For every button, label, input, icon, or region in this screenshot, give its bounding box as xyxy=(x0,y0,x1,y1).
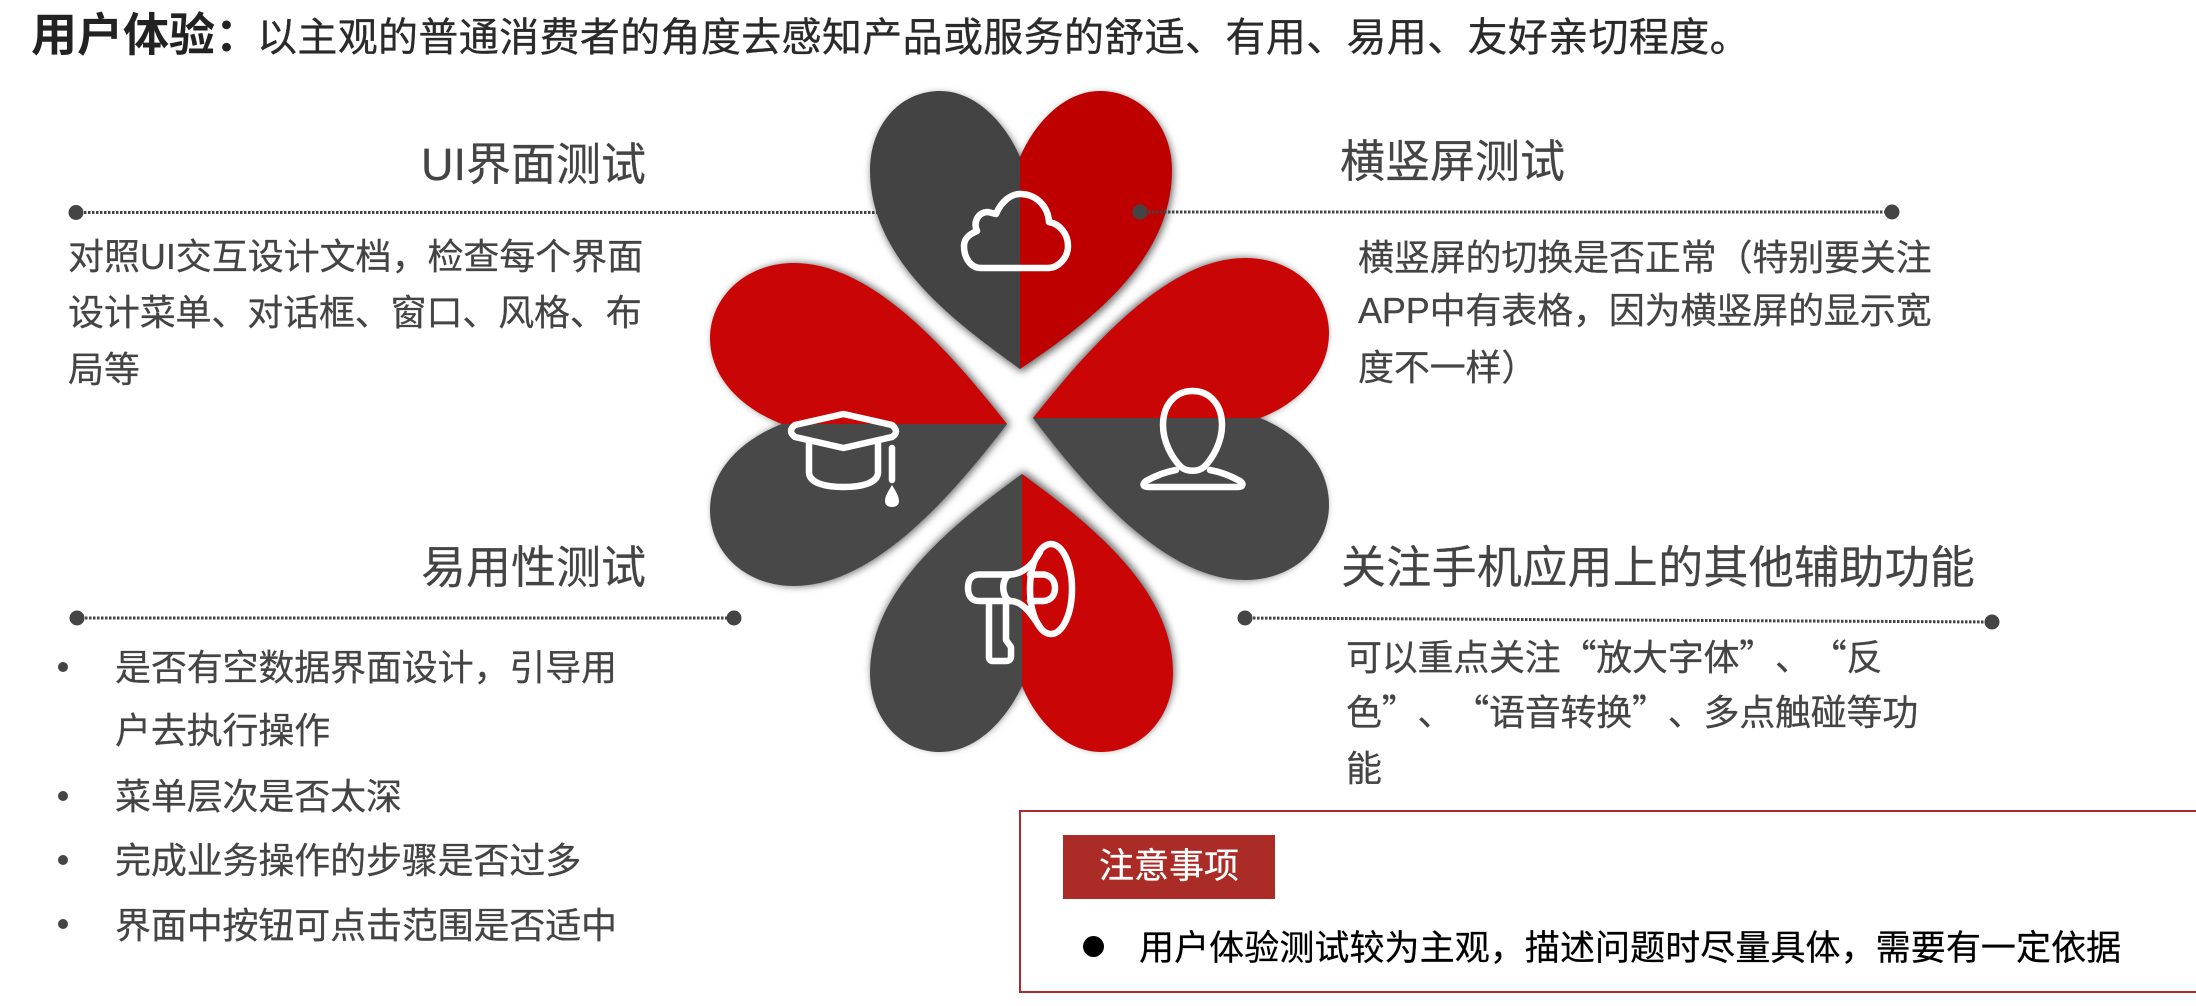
icon: megaphone xyxy=(968,544,1072,661)
connector line: UI test xyxy=(68,205,877,220)
heading: usability test: 易用性测试 xyxy=(421,542,646,593)
title: definition of user experience xyxy=(31,9,1750,61)
body text: UI interface test: 局等 xyxy=(68,349,140,390)
body text: orientation test: 度不一样） xyxy=(1358,339,1537,391)
petal: bottom xyxy=(870,474,1173,752)
connector line: auxiliary functions xyxy=(1238,610,2000,630)
panel: UI interface test xyxy=(68,139,646,390)
bullet list: usability test xyxy=(58,647,617,946)
body text: orientation test xyxy=(1358,229,1932,391)
title keyword: 用户体验： xyxy=(31,9,261,61)
panel: auxiliary functions xyxy=(1341,542,1975,792)
heading: auxiliary functions: 关注手机应用上的其他辅助功能 xyxy=(1341,542,1975,593)
body text: auxiliary functions: 色”、“语音转换”、多点触碰等功 xyxy=(1346,684,1918,736)
icon: cloud xyxy=(964,194,1068,268)
panel: orientation test xyxy=(1340,136,1932,391)
petal: top xyxy=(870,91,1172,369)
panel: usability test xyxy=(58,542,646,946)
body text: auxiliary functions: 可以重点关注“放大字体”、“反 xyxy=(1346,629,1882,681)
bullet list: usability test: 是否有空数据界面设计，引导用 xyxy=(115,647,617,688)
callout text: 用户体验测试较为主观，描述问题时尽量具体，需要有一定依据 xyxy=(1139,929,2121,968)
bullet list: usability test: 户去执行操作 xyxy=(115,710,330,751)
body text: UI interface test xyxy=(68,236,643,390)
petal: left xyxy=(710,263,1007,586)
icon: graduation cap xyxy=(791,414,899,507)
heading: UI interface test: UI界面测试 xyxy=(421,139,646,190)
icon: person xyxy=(1144,391,1242,487)
body text: auxiliary functions: 能 xyxy=(1346,740,1382,792)
body text: orientation test: APP中有表格，因为横竖屏的显示宽 xyxy=(1358,290,1932,331)
heading: orientation test: 横竖屏测试 xyxy=(1340,136,1565,187)
body text: orientation test: 横竖屏的切换是否正常（特别要关注 xyxy=(1358,229,1932,281)
body text: UI interface test: 对照UI交互设计文档，检查每个界面 xyxy=(68,236,643,277)
title definition text: 以主观的普通消费者的角度去感知产品或服务的舒适、有用、易用、友好亲切程度。 xyxy=(257,16,1750,60)
bullet list: usability test: 界面中按钮可点击范围是否适中 xyxy=(115,905,617,946)
connector line: usability test xyxy=(70,610,742,626)
body text: UI interface test: 设计菜单、对话框、窗口、风格、布 xyxy=(68,292,642,333)
callout label: 注意事项 xyxy=(1099,847,1239,886)
callout label xyxy=(1063,835,1275,899)
petal: right xyxy=(1033,258,1329,580)
bullet list: usability test: 菜单层次是否太深 xyxy=(115,776,402,817)
callout: notes box xyxy=(1019,810,2196,993)
callout bullet xyxy=(1083,936,1104,957)
bullet list: usability test: 完成业务操作的步骤是否过多 xyxy=(115,840,581,881)
body text: auxiliary functions xyxy=(1346,629,1918,792)
flower diagram xyxy=(707,88,1332,755)
connector line: orientation test xyxy=(1132,204,1900,220)
